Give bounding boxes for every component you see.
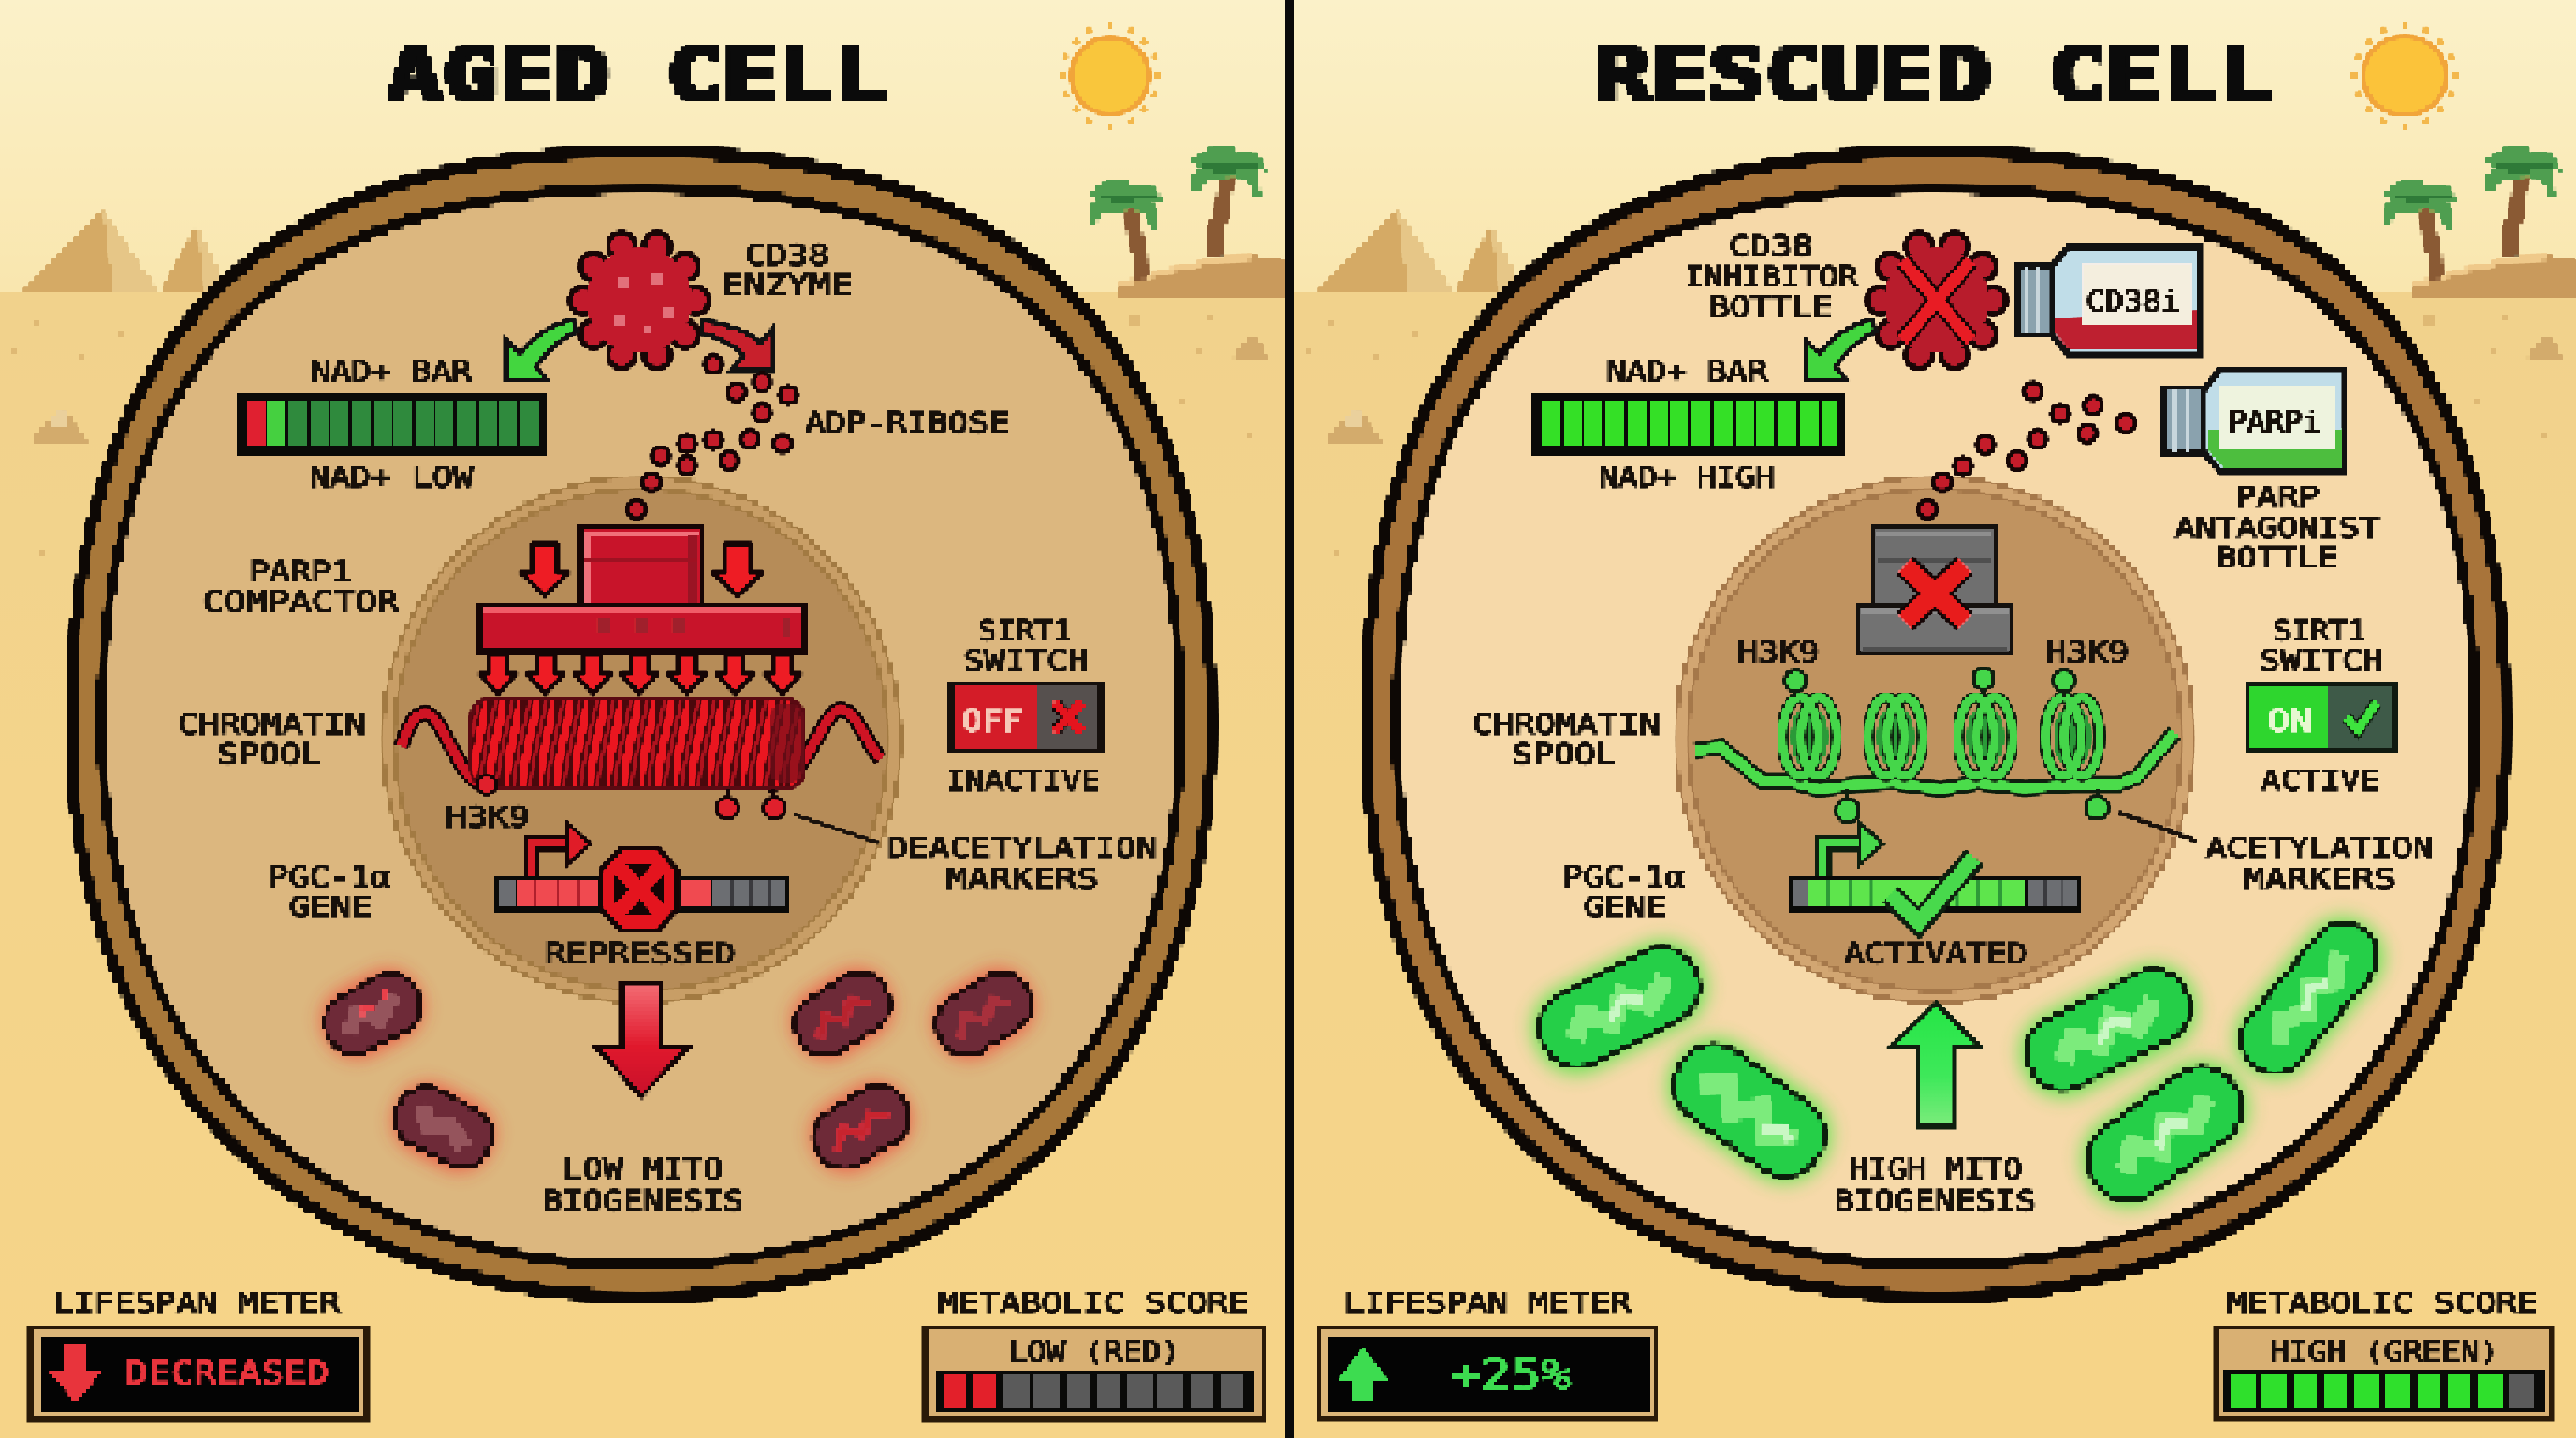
metabolic score gauge <box>926 1328 1263 1418</box>
mitochondria dim <box>316 963 1041 1178</box>
acetylation markers <box>1785 668 2108 822</box>
label: PARP antagonist bottle: PARP <box>2235 481 2320 514</box>
label: plus 25 percent: +25% <box>1451 1350 1571 1400</box>
desert sand <box>1294 292 2576 1438</box>
label: high mito biogenesis <box>1834 1153 2036 1218</box>
desert scenery <box>11 145 1287 556</box>
label: H3K9: H3K9 <box>446 801 530 834</box>
label: PARP1 compactor: PARP1 <box>249 556 352 589</box>
ADP-ribose particles <box>1919 383 2134 518</box>
icon: up arrow <box>1339 1347 1388 1400</box>
label: SIRT1 switch: SIRT1 <box>977 615 1073 648</box>
label: PARP antagonist bottle: BOTTLE <box>2217 542 2338 575</box>
desert sand <box>0 292 1286 1438</box>
label: chromatin spool: CHROMATIN <box>1471 709 1661 741</box>
label: PGC-1 alpha gene: GENE <box>289 891 372 924</box>
label: SIRT1 switch <box>2260 615 2383 678</box>
label: lifespan meter: LIFESPAN METER <box>1344 1287 1632 1320</box>
desert scenery <box>1306 145 2576 556</box>
label: CD38 enzyme: ENZYME <box>723 270 852 302</box>
mitochondria healthy <box>1528 911 2390 1215</box>
PGC-1 alpha gene repressed <box>494 824 788 932</box>
label: activated: ACTIVATED <box>1844 938 2027 971</box>
label: H3K9 left: H3K9 <box>1737 637 1820 669</box>
label: SIRT1 switch: SIRT1 <box>2273 615 2366 648</box>
label: high mito biogenesis: BIOGENESIS <box>1834 1185 2036 1218</box>
label: decreased: DECREASED <box>125 1355 329 1392</box>
PARP1 compactor disabled <box>1858 527 2012 653</box>
cell membrane <box>1360 145 2511 1303</box>
label: NAD+ bar: NAD+ BAR <box>1606 356 1768 389</box>
label: on: ON <box>2267 703 2312 739</box>
label: deacetylation markers: MARKERS <box>945 863 1099 896</box>
label: SIRT1 switch: SWITCH <box>963 645 1089 678</box>
NAD+ bar low <box>238 392 547 455</box>
label: acetylation markers: ACETYLATION <box>2205 832 2434 865</box>
label: NAD+ bar: NAD+ BAR <box>311 356 473 389</box>
leader line: deacetylation <box>794 814 878 843</box>
icon: stop valve <box>599 846 680 932</box>
panel: rescued cell <box>1294 0 2576 1438</box>
label: chromatin spool <box>178 709 365 771</box>
label: deacetylation markers <box>887 832 1157 896</box>
chromatin spool compacted <box>402 699 881 788</box>
label: metabolic score: METABOLIC SCORE <box>2227 1287 2538 1320</box>
mitochondria glow <box>1518 902 2398 1224</box>
label: SIRT1 switch: SWITCH <box>2260 645 2383 678</box>
panel: aged cell <box>0 0 1287 1438</box>
arrow: up high biogenesis <box>1892 1004 1980 1126</box>
SIRT1 switch off <box>949 682 1103 754</box>
metabolic score gauge <box>2217 1328 2552 1418</box>
lifespan meter <box>31 1328 366 1418</box>
desert sky <box>1294 0 2576 292</box>
label: lifespan meter: LIFESPAN METER <box>52 1287 342 1320</box>
label: PARP antagonist bottle: ANTAGONIST <box>2175 512 2379 545</box>
label: high mito biogenesis: HIGH MITO <box>1850 1153 2022 1186</box>
PARP1 compactor <box>480 527 804 693</box>
label: PARP1 compactor: COMPACTOR <box>202 586 400 619</box>
label: chromatin spool: CHROMATIN <box>178 709 365 741</box>
label: PGC-1 alpha gene <box>268 861 391 924</box>
label: PARPi: PARPi <box>2228 406 2321 439</box>
label: ADP-ribose: ADP-RIBOSE <box>805 407 1009 440</box>
rescued cell labels <box>1344 230 2538 1400</box>
label: PARP1 compactor <box>202 556 400 619</box>
label: CD38 inhibitor bottle: BOTTLE <box>1709 291 1833 324</box>
markers: H3K9 and deacetylation <box>477 775 784 818</box>
nucleus <box>382 477 900 1003</box>
SIRT1 switch on <box>2245 682 2397 754</box>
arrow: green to NAD bar <box>506 320 577 380</box>
label: CD38 inhibitor bottle: CD38 <box>1729 230 1813 263</box>
icon: down arrow <box>51 1344 100 1401</box>
label: off: OFF <box>962 703 1022 739</box>
label: active: ACTIVE <box>2261 765 2379 798</box>
diagram icons <box>31 233 1263 1418</box>
label: repressed: REPRESSED <box>545 938 736 971</box>
chromatin relaxed <box>1695 697 2174 789</box>
nucleus <box>1676 477 2194 1003</box>
lifespan meter <box>1319 1328 1656 1418</box>
icon: CD38 enzyme blocked <box>1867 233 2006 368</box>
cell membrane <box>66 145 1217 1303</box>
desert sky <box>0 0 1286 292</box>
icon: CD38i bottle <box>2018 247 2200 354</box>
label: NAD+ high: NAD+ HIGH <box>1599 462 1775 494</box>
label: CD38 enzyme: CD38 <box>745 240 829 272</box>
icon: sun <box>1060 22 1161 129</box>
label: inactive: INACTIVE <box>945 765 1101 798</box>
title: RESCUED CELL <box>1595 34 2275 118</box>
label: CD38i: CD38i <box>2086 286 2181 318</box>
label: SIRT1 switch <box>963 615 1089 678</box>
label: chromatin spool: SPOOL <box>1513 739 1616 771</box>
label: PGC-1 alpha gene: PGC-1α <box>268 861 391 894</box>
label: PGC-1 alpha gene: GENE <box>1584 891 1666 924</box>
label: low red: LOW (RED) <box>1008 1336 1180 1369</box>
PGC-1 alpha gene activated <box>1789 824 2082 922</box>
label: metabolic score: METABOLIC SCORE <box>938 1287 1249 1320</box>
label: low mito biogenesis: BIOGENESIS <box>543 1185 743 1218</box>
title: AGED CELL <box>387 34 890 118</box>
label: high green: HIGH (GREEN) <box>2270 1336 2498 1369</box>
label: acetylation markers: MARKERS <box>2243 863 2396 896</box>
label: PGC-1 alpha gene: PGC-1α <box>1563 861 1685 894</box>
arrow: green to NAD bar <box>1806 320 1876 380</box>
label: chromatin spool: SPOOL <box>217 739 322 771</box>
label: CD38 inhibitor bottle: INHIBITOR <box>1685 261 1859 294</box>
icon: sun <box>2351 22 2458 129</box>
icon: red X <box>1905 565 1965 622</box>
panel divider <box>1285 0 1294 1438</box>
label: CD38 inhibitor bottle <box>1685 230 1859 324</box>
label: H3K9 right: H3K9 <box>2046 637 2129 669</box>
diagram icons <box>1319 233 2552 1418</box>
icon: PARPi bottle <box>2164 370 2344 471</box>
label: chromatin spool <box>1471 709 1661 771</box>
mitochondria glow <box>312 958 1045 1183</box>
icon: check mark <box>1890 858 1974 922</box>
label: CD38 enzyme <box>723 240 852 302</box>
ADP-ribose particles <box>628 356 797 518</box>
NAD+ bar high <box>1532 392 1844 455</box>
arrow: down low biogenesis <box>597 985 688 1095</box>
label: NAD+ low: NAD+ LOW <box>309 462 475 494</box>
arrow: red to ADP-ribose <box>702 320 772 370</box>
label: PGC-1 alpha gene <box>1563 861 1685 924</box>
leader line: acetylation <box>2119 813 2196 841</box>
label: PARP antagonist bottle <box>2175 481 2379 575</box>
label: low mito biogenesis: LOW MITO <box>564 1153 723 1186</box>
label: low mito biogenesis <box>543 1153 743 1218</box>
icon: CD38 enzyme <box>570 233 709 368</box>
label: acetylation markers <box>2205 832 2434 896</box>
aged cell labels <box>52 240 1249 1392</box>
label: deacetylation markers: DEACETYLATION <box>887 832 1157 865</box>
